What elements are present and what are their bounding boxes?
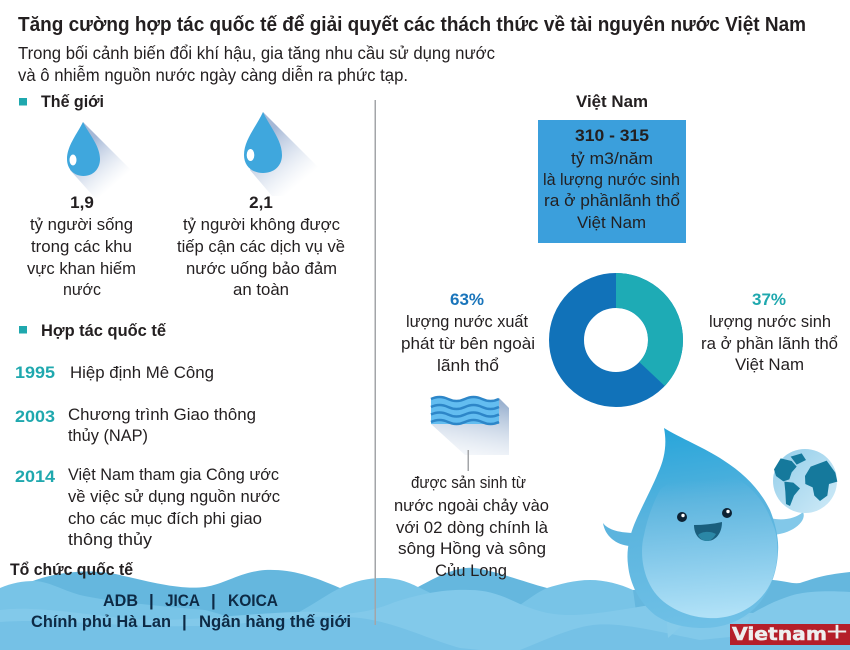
callout: 310 - 315: là lượng nước sinh — [543, 170, 680, 189]
callout: 310 - 315: 310 - 315 — [575, 126, 649, 145]
stat: 63%: phát từ bên ngoài — [401, 334, 535, 353]
text: river source: Củu Long — [435, 561, 507, 580]
drop body — [627, 428, 778, 628]
subtitle: và ô nhiễm nguồn nước ngày càng diễn ra phức tạp. — [18, 64, 408, 85]
panel: thế giới — [19, 92, 345, 299]
stat: 37% — [701, 290, 838, 374]
stat: 63%: lượng nước xuất — [406, 312, 528, 331]
panel: tổ chức quốc tế: Chính phủ Hà Lan — [31, 612, 171, 631]
text: river source: được sản sinh từ — [411, 473, 526, 492]
mouth — [694, 522, 722, 541]
text: river source: sông Hồng và sông — [398, 539, 546, 558]
timeline 2003: thủy (NAP) — [68, 426, 148, 445]
globe — [773, 449, 837, 513]
timeline 2003 — [15, 405, 256, 445]
title: Tăng cường hợp tác quốc tế để giải quyết các thách thức về tài nguyên nước Việt Nam — [18, 14, 806, 36]
stat: 2,1: an toàn — [233, 280, 289, 299]
feet — [666, 612, 686, 638]
arms — [603, 523, 636, 546]
logo: vietnam+ — [730, 616, 850, 647]
subtitle — [18, 43, 495, 85]
callout: 310 - 315: Việt Nam — [577, 213, 646, 232]
panel: tổ chức quốc tế — [10, 560, 351, 631]
panel: tổ chức quốc tế: Ngân hàng thế giới — [199, 612, 351, 631]
timeline 2003: Chương trình Giao thông — [68, 405, 256, 424]
logo: vietnam+: Vietnam — [732, 624, 827, 645]
icon: water waves — [431, 397, 509, 455]
stat: 63%: 63% — [450, 290, 484, 309]
stat: 37%: lượng nước sinh — [709, 312, 831, 331]
timeline 1995: 1995 — [15, 363, 55, 382]
panel: hợp tác quốc tế — [15, 321, 280, 549]
subtitle: Trong bối cảnh biến đổi khí hậu, gia tăng nhu cầu sử dụng nước — [18, 43, 495, 63]
panel: tổ chức quốc tế: JICA — [165, 591, 200, 610]
logo: vietnam+: + — [826, 616, 848, 647]
stat: 63% — [401, 290, 535, 375]
panel: tổ chức quốc tế: KOICA — [228, 591, 278, 610]
timeline 2014: cho các mục đích phi giao — [68, 509, 262, 528]
text: river source: nước ngoài chảy vào — [394, 496, 549, 515]
stat: 1,9: tỷ người sống — [30, 215, 133, 234]
background waves — [0, 568, 850, 650]
callout: 310 - 315: tỷ m3/năm — [571, 149, 653, 168]
timeline 2014 — [15, 465, 280, 549]
stat: 37%: 37% — [752, 290, 786, 309]
stat: 2,1 — [177, 193, 345, 299]
eyes — [677, 512, 687, 522]
stat: 2,1: 2,1 — [249, 193, 273, 212]
callout: 310 - 315 — [538, 120, 686, 243]
stat: 1,9: trong các khu — [31, 237, 132, 256]
timeline 2014: 2014 — [15, 467, 56, 486]
panel: tổ chức quốc tế: | — [149, 591, 154, 610]
illustration: water drop mascot with globe — [603, 428, 837, 638]
stat: 1,9 — [27, 193, 136, 299]
timeline 2003: 2003 — [15, 407, 55, 426]
stat: 2,1: nước uống bảo đảm — [186, 259, 337, 278]
timeline 1995: Hiệp định Mê Công — [70, 363, 214, 382]
heading: thế giới: Thế giới — [41, 92, 104, 111]
heading: việt nam: Việt Nam — [576, 92, 648, 111]
heading: hợp tác quốc tế: Hợp tác quốc tế — [41, 321, 167, 340]
stat: 1,9: nước — [63, 280, 101, 299]
timeline 2014: Việt Nam tham gia Công ước — [68, 465, 279, 484]
stat: 2,1: tiếp cận các dịch vụ về — [177, 237, 345, 256]
stat: 1,9: 1,9 — [70, 193, 94, 212]
stat: 37%: ra ở phần lãnh thổ — [701, 334, 838, 353]
panel: tổ chức quốc tế: ADB — [103, 591, 138, 610]
icon: water drop 1.9 — [67, 122, 132, 198]
text: river source: với 02 dòng chính là — [396, 518, 549, 537]
timeline 2014: thông thủy — [68, 530, 153, 549]
icon: water drop 2.1 — [244, 112, 318, 196]
text: river source — [394, 473, 549, 580]
donut chart — [566, 290, 666, 390]
timeline 2014: về việc sử dụng nguồn nước — [68, 487, 280, 506]
stat: 37%: Việt Nam — [735, 355, 804, 374]
callout: 310 - 315: ra ở phầnlãnh thổ — [544, 191, 680, 210]
stat: 1,9: vực khan hiếm — [27, 259, 136, 278]
stat: 63%: lãnh thổ — [437, 356, 499, 375]
panel: tổ chức quốc tế: | — [182, 612, 187, 631]
panel: tổ chức quốc tế: Tổ chức quốc tế — [10, 560, 134, 579]
panel: tổ chức quốc tế: | — [211, 591, 216, 610]
stat: 2,1: tỷ người không được — [183, 215, 340, 234]
